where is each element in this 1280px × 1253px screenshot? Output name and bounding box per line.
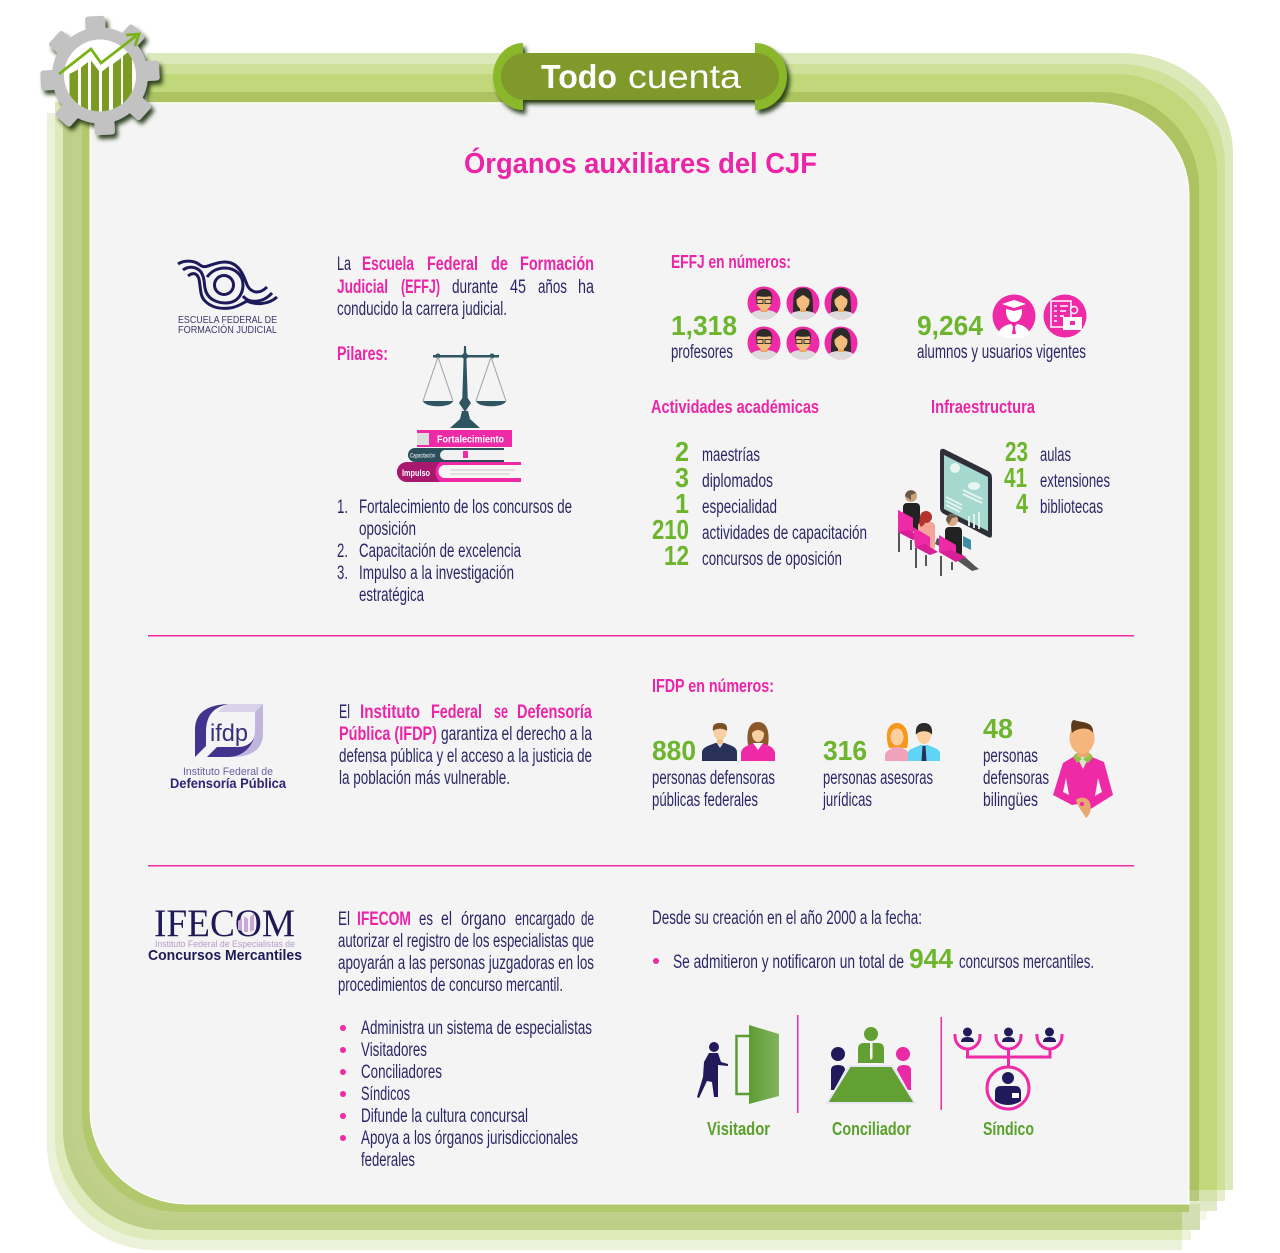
stat: 48 personas defensoras bilingües: personas — [983, 746, 1038, 767]
heading: Actividades académicas: Actividades académicas — [651, 397, 819, 417]
text block: EFFJ description: 45 — [510, 277, 526, 298]
list: pilares: 3. — [337, 563, 348, 584]
stat: 880 personas defensoras: 880 — [652, 735, 696, 766]
text block: IFECOM description: procedimientos de concurso mercantil. — [338, 975, 563, 996]
text block: IFDP description: Defensoría — [517, 702, 592, 723]
icon: man with hands — [1053, 720, 1113, 818]
logo: Escuela Federal de Formación Judicial: ESCUELA FEDERAL DE — [178, 314, 277, 326]
list: actividades académicas: maestrías — [702, 445, 760, 466]
text block: IFDP description: defensa pública y el acceso a la justicia de — [339, 746, 592, 767]
logo: IFECOM: Instituto Federal de Especialistas de — [155, 939, 295, 949]
stat: 1,318 profesores — [671, 286, 858, 363]
list: infraestructura: 41 — [1004, 462, 1027, 493]
stat: 880 personas defensoras: públicas federales — [652, 790, 758, 811]
icon: Visitador — [697, 1025, 779, 1139]
logo: Instituto Federal de Defensoría Pública: Defensoría Pública — [170, 776, 286, 791]
stat: 316 personas asesoras: jurídicas — [822, 790, 872, 811]
list: pilares: 1. — [337, 497, 348, 518]
text block: IFDP description — [339, 702, 592, 789]
text block: IFDP description: Instituto — [360, 702, 420, 723]
callout: 944 concursos mercantiles — [653, 943, 1094, 974]
list: infraestructura: 4 — [1016, 488, 1028, 519]
text block: EFFJ description: conducido la carrera judicial. — [337, 299, 507, 320]
stat: 880 personas defensoras: personas defensoras — [652, 768, 775, 789]
text block: IFDP description: Pública (IFDP) — [339, 724, 437, 745]
stat: 9,264 alumnos: alumnos y usuarios vigentes — [917, 342, 1086, 363]
text block: IFDP description: la población más vulnerable. — [339, 768, 510, 789]
icon: Conciliador — [827, 1027, 915, 1139]
list: actividades académicas: 3 — [675, 462, 689, 493]
icon: Visitador: Visitador — [707, 1119, 770, 1139]
list: actividades académicas: actividades de capacitación — [702, 523, 867, 544]
list: pilares: Fortalecimiento de los concursos de — [359, 497, 572, 518]
callout: 944 concursos mercantiles: Se admitieron y notificaron un total de — [673, 952, 904, 973]
icon: checklist and user — [1044, 294, 1086, 338]
stat: 316 personas asesoras: personas asesoras — [823, 768, 933, 789]
list: funciones IFECOM: Conciliadores — [361, 1062, 442, 1083]
list: infraestructura: aulas — [1040, 445, 1071, 466]
list: infraestructura: extensiones — [1040, 471, 1110, 492]
callout: 944 concursos mercantiles: concursos mercantiles. — [959, 952, 1094, 973]
text block: EFFJ description: Federal — [427, 254, 478, 275]
list: actividades académicas: 210 — [652, 514, 689, 545]
stat: 1,318 profesores: profesores — [671, 342, 733, 363]
stat: 880 personas defensoras — [652, 722, 775, 811]
icon: graduate — [992, 294, 1036, 338]
stat: 48 personas defensoras bilingües: bilingües — [983, 790, 1038, 811]
icon: Síndico: Síndico — [983, 1119, 1034, 1139]
stat: 1,318 profesores: 1,318 — [671, 310, 737, 341]
text block: EFFJ description: de — [491, 254, 508, 275]
list: pilares: estratégica — [359, 585, 424, 606]
text block: IFECOM description: de — [581, 909, 594, 930]
logo: IFECOM — [148, 902, 302, 964]
text block: IFDP description: El — [339, 702, 350, 723]
stat: 48 personas defensoras bilingües: defensoras — [983, 768, 1049, 789]
list: pilares: 2. — [337, 541, 348, 562]
stat: 48 personas defensoras bilingües: 48 — [983, 713, 1013, 744]
list: funciones IFECOM: Apoya a los órganos jurisdiccionales — [361, 1128, 578, 1149]
list: infraestructura: 23 — [1005, 436, 1028, 467]
list: actividades académicas: concursos de oposición — [702, 549, 842, 570]
list: funciones IFECOM: Difunde la cultura concursal — [361, 1106, 528, 1127]
logo: IFECOM: IFECOM — [154, 902, 295, 945]
text block: EFFJ description: años — [538, 277, 567, 298]
text block: EFFJ description: (EFFJ) — [401, 277, 440, 298]
text block: IFDP description: se — [494, 702, 508, 723]
list: pilares: oposición — [359, 519, 416, 540]
title badge: Todo cuenta: Todo — [541, 58, 617, 95]
logo: IFECOM: Concursos Mercantiles — [148, 947, 302, 964]
icon: gear with growth chart — [40, 16, 160, 135]
list: pilares: Impulso a la investigación — [359, 563, 514, 584]
text block: IFECOM description: El — [338, 909, 350, 930]
heading: Infraestructura: Infraestructura — [931, 397, 1036, 417]
logo: Instituto Federal de Defensoría Pública: Instituto Federal de — [183, 766, 273, 778]
list: pilares — [337, 497, 572, 606]
stat: 9,264 alumnos — [917, 294, 1086, 363]
text block: EFFJ description: Formación — [520, 254, 594, 275]
text block: IFDP description: Federal — [431, 702, 482, 723]
text block: IFECOM description: órgano — [461, 909, 506, 930]
list: actividades académicas — [652, 436, 867, 571]
list: funciones IFECOM: Síndicos — [361, 1084, 410, 1105]
text block: IFECOM description: es — [419, 909, 433, 930]
list: actividades académicas: 2 — [675, 436, 689, 467]
text block: IFECOM description: el — [441, 909, 452, 930]
icon: classroom with screen — [898, 449, 992, 576]
text block: IFECOM description — [338, 909, 594, 996]
list: funciones IFECOM: Administra un sistema de especialistas — [361, 1018, 592, 1039]
list: funciones IFECOM — [340, 1018, 592, 1171]
text block: IFECOM description: encargado — [515, 909, 575, 930]
logo: Escuela Federal de Formación Judicial: FORMACIÓN JUDICIAL — [178, 323, 277, 336]
logo: Instituto Federal de Defensoría Pública — [170, 704, 286, 791]
list: actividades académicas: 1 — [675, 488, 689, 519]
stat: 48 personas defensoras bilingües — [983, 713, 1113, 818]
text block: EFFJ description: Judicial — [337, 277, 388, 298]
logo: Escuela Federal de Formación Judicial — [178, 261, 277, 336]
text block: IFECOM description: apoyarán a las personas juzgadoras en los — [338, 953, 594, 974]
heading: Pilares: Pilares: — [337, 344, 388, 365]
stat: 316 personas asesoras — [822, 723, 940, 811]
list: actividades académicas: diplomados — [702, 471, 773, 492]
icon: scales on books: Impulso — [402, 468, 430, 478]
text block: EFFJ description: Escuela — [362, 254, 414, 275]
list: funciones IFECOM: federales — [361, 1150, 415, 1171]
text block: IFDP description: garantiza el derecho a la — [441, 724, 592, 745]
list: funciones IFECOM: Visitadores — [361, 1040, 427, 1061]
icon: Síndico — [955, 1028, 1062, 1139]
stat: 316 personas asesoras: 316 — [823, 735, 867, 766]
logo: Instituto Federal de Defensoría Pública: ifdp — [210, 720, 248, 747]
text block: EFFJ description: ha — [578, 277, 594, 298]
list: infraestructura — [1004, 436, 1110, 519]
text block: IFECOM description: IFECOM — [357, 909, 411, 930]
list: pilares: Capacitación de excelencia — [359, 541, 521, 562]
list: actividades académicas: 12 — [664, 540, 689, 571]
title: Órganos auxiliares del CJF — [464, 146, 817, 180]
text block: IFECOM description: autorizar el registro de los especialistas que — [338, 931, 594, 952]
icon: scales on books — [397, 346, 521, 482]
text block: EFFJ description — [337, 254, 594, 320]
icon: scales on books: Capacitación — [410, 452, 435, 460]
text: desde su creación: Desde su creación en el año 2000 a la fecha: — [652, 908, 922, 929]
title badge: Todo cuenta: cuenta — [628, 58, 742, 95]
heading: EFFJ en números: EFFJ en números: — [671, 252, 791, 272]
heading: IFDP en números: IFDP en números: — [652, 676, 774, 696]
icon: scales on books: Fortalecimiento — [437, 434, 504, 446]
list: actividades académicas: especialidad — [702, 497, 777, 518]
text block: EFFJ description: La — [337, 254, 351, 275]
stat: 9,264 alumnos: 9,264 — [917, 310, 983, 341]
title badge: Todo cuenta — [493, 43, 787, 110]
callout: 944 concursos mercantiles: 944 — [909, 943, 953, 974]
icon: Conciliador: Conciliador — [832, 1119, 911, 1139]
text block: EFFJ description: durante — [452, 277, 498, 298]
list: infraestructura: bibliotecas — [1040, 497, 1103, 518]
